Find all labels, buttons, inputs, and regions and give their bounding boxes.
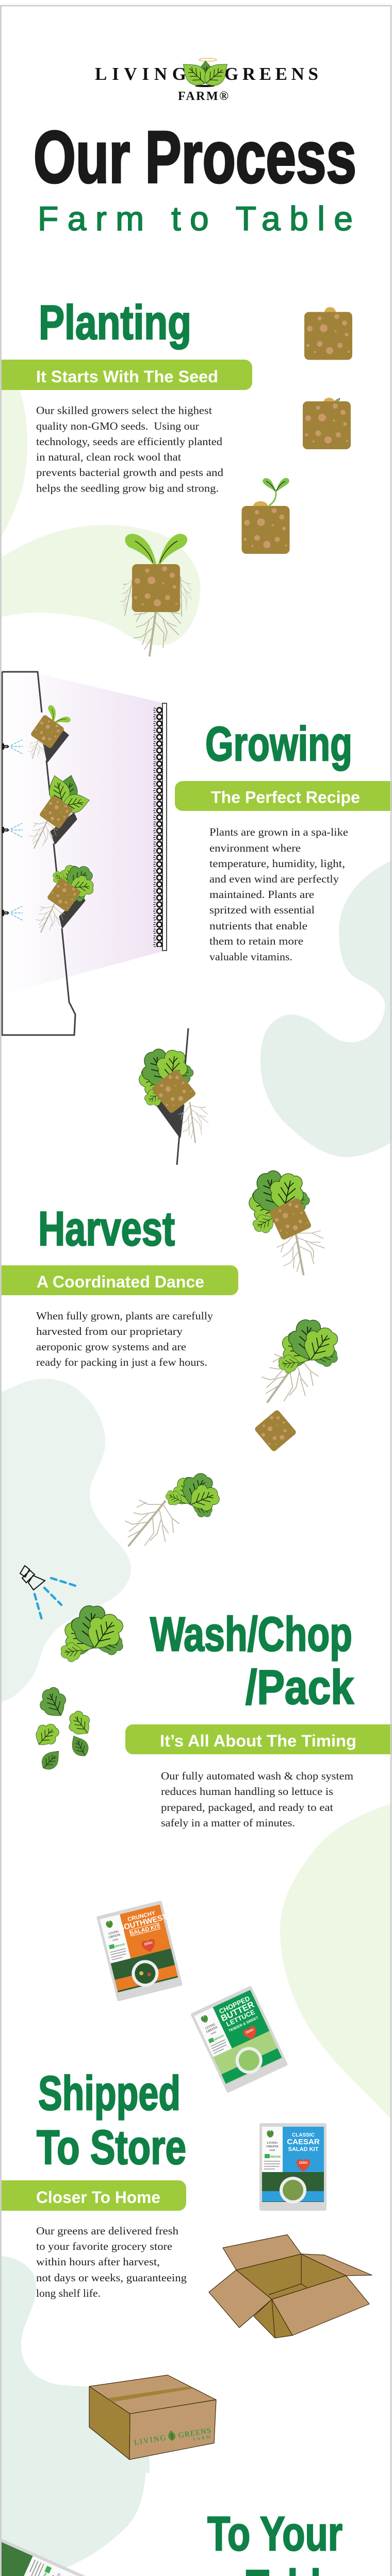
panel: growing (1, 672, 392, 1035)
text: growing description: them to retain more (209, 935, 303, 947)
illustration: plant removed from cube (253, 1318, 343, 1452)
text: shipping description: within hours after harvest, (36, 2256, 160, 2268)
package: classic caesar salad kit: CLASSIC (292, 2132, 315, 2138)
heading: shipped to store (37, 2066, 186, 2174)
package: classic caesar salad kit: CAESAR (287, 2138, 320, 2146)
lower background blob (0, 2421, 146, 2568)
banner: it's all about the timing (125, 1724, 392, 1754)
text: harvest description: When fully grown, plants are carefully (36, 1310, 214, 1322)
text: growing description: spritzed with essential (209, 904, 315, 916)
led light strip (153, 703, 167, 951)
package: crunchy southwest salad kit: ZERO (144, 1941, 153, 1946)
heading: harvest: Harvest (38, 1201, 175, 1256)
text: growing description (209, 826, 348, 963)
text: wash description (161, 1770, 353, 1829)
icon: seedling with roots (119, 534, 194, 656)
lower page frame (1, 2473, 391, 2576)
banner: it starts with the seed: It Starts With The Seed (36, 367, 218, 386)
banner: the perfect recipe: The Perfect Recipe (211, 788, 360, 807)
text: planting description: quality non-GMO seeds. Using our (36, 420, 199, 432)
package: chopped butter lettuce: ZERO (245, 2028, 254, 2035)
banner: closer to home (0, 2180, 186, 2211)
text: growing description: temperature, humidity, light, (209, 857, 345, 870)
text: shipping description: Our greens are delivered fresh (36, 2225, 179, 2237)
text: shipping description (36, 2225, 187, 2299)
text: shipping description: not days or weeks, guaranteeing (36, 2272, 187, 2284)
chart: grow tower with light (1, 672, 167, 1035)
package: chopped butter lettuce (190, 1986, 288, 2093)
icon: seed sprouting (303, 398, 351, 449)
package: crunchy southwest salad kit: CRUNCHY (127, 1910, 156, 1923)
icon: closed box with logo: GREENS (178, 2427, 211, 2440)
panel: harvest (0, 1028, 343, 1562)
package: classic caesar salad kit: ZERO (299, 2162, 308, 2165)
text: growing description: and even wind are perfectly (209, 873, 339, 885)
icon: closed box with logo (89, 2375, 216, 2460)
icon: chopped leaves (30, 1684, 96, 1773)
text: harvest description: aeroponic grow systems and are (36, 1341, 186, 1353)
text: harvest description (36, 1310, 214, 1368)
text: planting description: prevents bacterial growth and pests and (36, 466, 224, 479)
package: chopped butter lettuce: TENDER & SWEET (228, 2016, 259, 2033)
text: wash description: reduces human handling so lettuce is (161, 1785, 333, 1798)
heading: wash chop pack: /Pack (246, 1660, 354, 1714)
banner: a coordinated dance: A Coordinated Dance (37, 1273, 204, 1291)
icon: seed in cube (304, 307, 352, 360)
subtitle: Farm to Table (38, 199, 353, 238)
banner: it starts with the seed (0, 360, 252, 390)
tower frame (2, 672, 75, 1035)
illustration: plant in tower (122, 1028, 214, 1165)
text: wash description: prepared, packaged, and ready to eat (161, 1801, 333, 1814)
heading: shipped to store: Shipped (38, 2066, 181, 2120)
text: growing description: nutrients that enable (209, 920, 307, 932)
logo (95, 57, 318, 103)
plant 3 (32, 852, 105, 937)
text: planting description: technology, seeds are efficiently planted (36, 435, 223, 448)
text: planting description: Our skilled growers select the highest (36, 404, 212, 416)
text: harvest description: ready for packing in just a few hours. (36, 1356, 207, 1368)
text: wash description: safely in a matter of minutes. (161, 1817, 295, 1829)
package: crunchy southwest salad kit: SALAD KIT (129, 1923, 160, 1937)
light glow (1, 673, 164, 995)
logo: FARM® (178, 90, 228, 103)
heading: to your table (207, 2506, 342, 2576)
text: shipping description: long shelf life. (36, 2287, 101, 2299)
icon: water sprayer (20, 1566, 79, 1621)
text: shipping description: to your favorite grocery store (36, 2240, 172, 2252)
plant 2 (26, 773, 91, 853)
text: growing description: Plants are grown in a spa-like (209, 826, 348, 838)
pockets (44, 731, 85, 927)
text: growing description: valuable vitamins. (209, 951, 292, 963)
heading: to your table: To Your (207, 2506, 342, 2561)
panel: shipped to store (0, 1900, 372, 2460)
panel: to your table (0, 2506, 392, 2576)
icon: open box (209, 2235, 372, 2338)
sprayers (2, 740, 23, 920)
logo: GREENS (224, 64, 318, 84)
text: growing description: maintained. Plants are (209, 888, 314, 901)
panel: planting (0, 295, 352, 656)
icon: closed box with logo: LIVING (134, 2434, 167, 2447)
banner: it's all about the timing: It’s All About The Timing (160, 1732, 356, 1750)
package: classic caesar salad kit: SALAD KIT (288, 2146, 319, 2153)
banner: closer to home: Closer To Home (36, 2188, 160, 2207)
package: classic caesar salad kit (259, 2123, 326, 2211)
illustration: harvested plant (232, 1157, 333, 1280)
text: planting description: helps the seedling grow big and strong. (36, 482, 219, 495)
text: planting description (36, 404, 224, 495)
package: chopped butter lettuce: CHOPPED (218, 1994, 251, 2015)
illustration: leaves and roots separated (115, 1460, 232, 1562)
logo: LIVING (95, 64, 186, 84)
plant 1 (27, 704, 72, 760)
text: growing description: environment where (209, 842, 301, 854)
package: chopped butter lettuce: BUTTER (219, 1999, 256, 2023)
package: crisp harvest salad kit (0, 2534, 89, 2576)
icon: seedling (241, 478, 290, 554)
banner: the perfect recipe (175, 781, 392, 811)
banner: a coordinated dance (0, 1265, 238, 1295)
text: planting description: in natural, clean rock wool that (36, 451, 181, 463)
text: harvest description: harvested from our proprietary (36, 1325, 183, 1337)
package: chopped butter lettuce: LETTUCE (225, 2008, 256, 2028)
lower sections (0, 2473, 392, 2576)
heading: planting: Planting (39, 295, 191, 349)
icon: lettuce head (57, 1604, 129, 1664)
panel: wash chop pack (20, 1566, 392, 1829)
icon: closed box with logo: FARM (193, 2434, 211, 2442)
heading: wash chop pack (150, 1607, 354, 1714)
package: crunchy southwest salad kit: SOUTHWEST (118, 1912, 168, 1933)
heading: shipped to store: To Store (37, 2120, 186, 2174)
package: crunchy southwest salad kit (96, 1900, 184, 2002)
text: wash description: Our fully automated wash & chop system (161, 1770, 353, 1782)
